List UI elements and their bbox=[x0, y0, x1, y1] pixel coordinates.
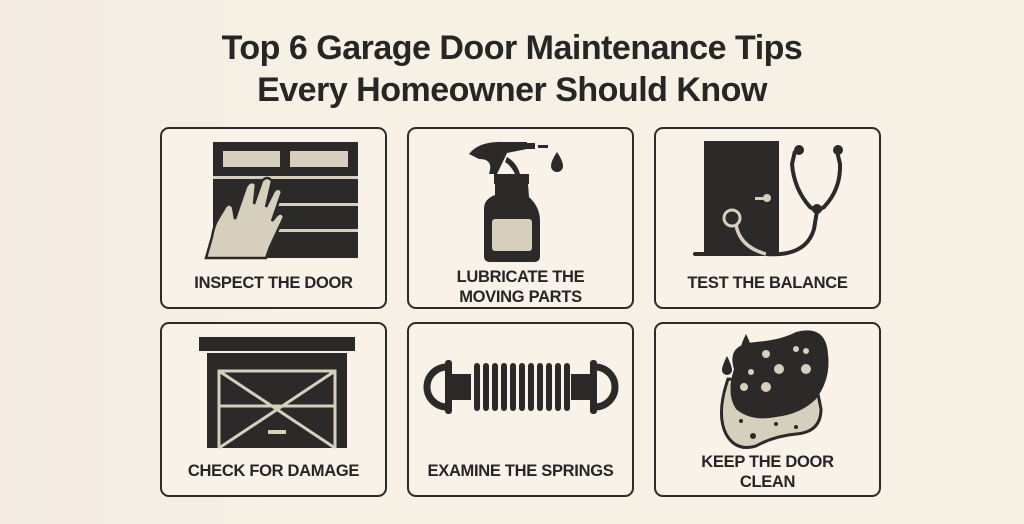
panel: test balance bbox=[654, 127, 881, 309]
label: INSPECT THE DOOR bbox=[194, 274, 353, 292]
label: CLEAN bbox=[740, 473, 795, 491]
label: MOVING PARTS bbox=[459, 288, 582, 306]
icon: garage bbox=[199, 337, 355, 450]
panel: lubricate bbox=[407, 127, 634, 309]
label bbox=[457, 268, 584, 306]
label: EXAMINE THE SPRINGS bbox=[428, 462, 613, 480]
label: LUBRICATE THE bbox=[457, 268, 584, 286]
title: Every Homeowner Should Know bbox=[257, 71, 767, 109]
label: KEEP THE DOOR bbox=[701, 453, 834, 471]
icon: door and stethoscope bbox=[693, 141, 843, 256]
panel: springs bbox=[407, 322, 634, 497]
label: CHECK FOR DAMAGE bbox=[188, 462, 359, 480]
icon: spring bbox=[424, 360, 618, 414]
panel: inspect the door bbox=[160, 127, 387, 309]
panel: check for damage bbox=[160, 322, 387, 497]
label: TEST THE BALANCE bbox=[687, 274, 848, 292]
panel: keep clean bbox=[654, 322, 881, 497]
icon: spray bottle bbox=[469, 142, 563, 262]
icon: door with hand bbox=[204, 142, 358, 260]
title bbox=[222, 29, 802, 109]
title: Top 6 Garage Door Maintenance Tips bbox=[222, 29, 802, 67]
icon: sponge bbox=[720, 330, 828, 449]
label bbox=[701, 453, 834, 491]
